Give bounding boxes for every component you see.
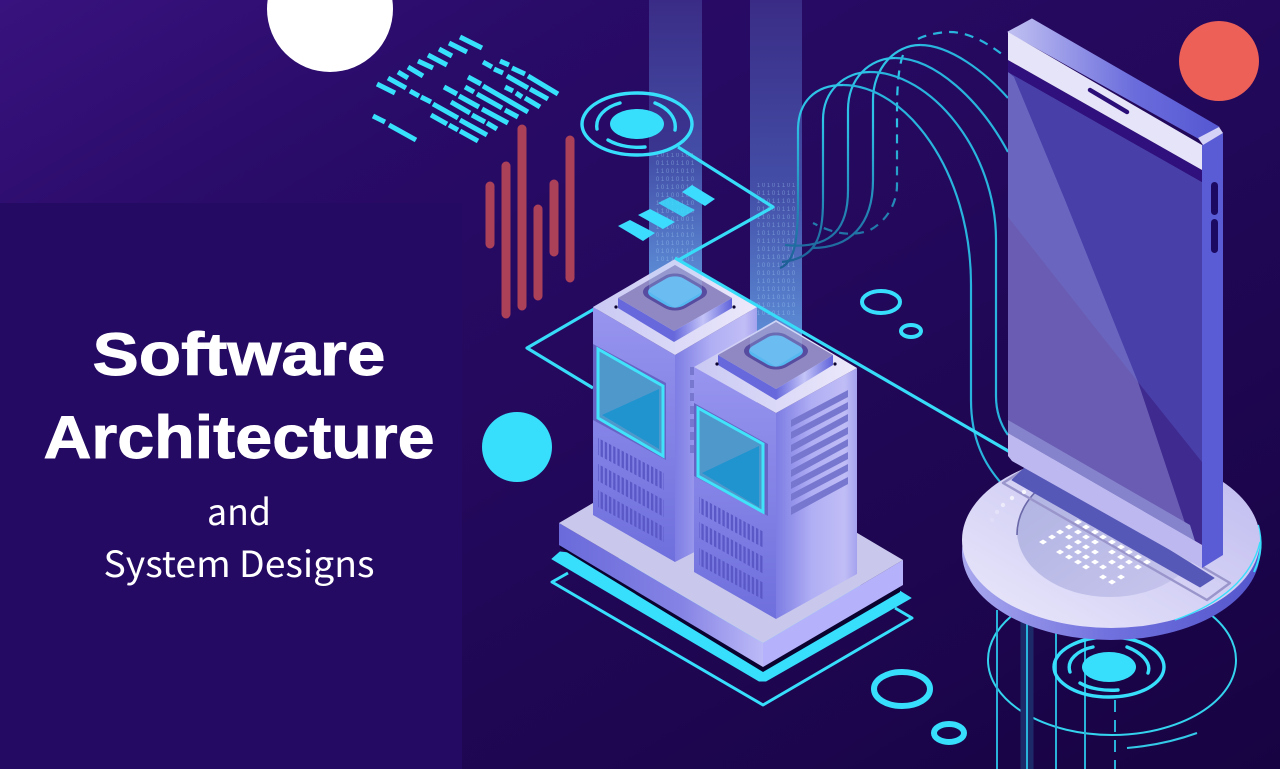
binary digits left beam: 0 1 0 1 1 0 1 0: [656, 233, 695, 239]
title: Architecture: [44, 404, 434, 471]
phone screen: [1008, 72, 1202, 545]
binary digits left beam: 1 0 1 0 0 1 1 1: [656, 225, 695, 231]
slot outline: [1003, 466, 1230, 600]
lower rings: [874, 672, 964, 742]
title: [44, 321, 434, 471]
binary digits right beam: 0 1 1 0 1 1 0 1: [757, 239, 796, 245]
binary digits right beam: 1 1 0 1 0 1 0 1: [757, 215, 796, 221]
white circle: [267, 0, 393, 72]
cyan dash pattern: [373, 37, 558, 141]
binary digits left beam: 0 1 0 1 0 1 1 0: [656, 177, 695, 183]
bottom arc: [1127, 733, 1197, 748]
binary digits right beam: 1 0 0 1 1 0 1 1: [757, 263, 796, 269]
chip plate back tower: [618, 298, 674, 342]
binary digits right beam: 0 1 0 1 0 1 1 0: [757, 271, 796, 277]
phone base disc: [962, 452, 1261, 640]
phone top bezel: [1008, 32, 1202, 170]
thick cyan platform band: [552, 552, 911, 681]
phone bottom bezel: [1008, 433, 1202, 568]
vents back tower: [598, 438, 664, 490]
side stripes front tower: [791, 390, 848, 515]
screen light band: [1008, 72, 1195, 541]
server tower front: [694, 320, 857, 619]
window front tower: [694, 403, 768, 516]
binary digits left beam: 1 0 1 1 0 1 0 1: [656, 153, 695, 159]
top ring target: [582, 93, 692, 155]
phone speaker: [1090, 90, 1127, 112]
server platform: [559, 440, 903, 667]
screen lower band: [1008, 420, 1195, 541]
small rings right of towers: [862, 291, 921, 337]
binary digits left beam: 1 1 0 1 0 1 0 1: [656, 241, 695, 247]
arch signal lines: [780, 32, 1008, 484]
big thin ring below phone: [988, 585, 1236, 735]
subtitle: System Designs: [104, 536, 374, 588]
data tiles: [618, 185, 715, 241]
binary digits right beam: 0 1 1 0 0 1 1 0: [757, 207, 796, 213]
binary digits right beam: 1 0 1 0 1 1 0 1: [757, 311, 796, 317]
binary digits left beam: 1 0 1 1 0 0 1 1: [656, 185, 695, 191]
server tower back: [593, 259, 757, 562]
vertical signal lines: [997, 610, 1115, 769]
binary digits right beam: 1 1 0 1 1 0 0 1: [757, 279, 796, 285]
binary digits right beam: 0 1 1 1 0 1 0 1: [757, 255, 796, 261]
binary digits left beam: 1 0 1 1 0 1 0 1: [656, 257, 695, 263]
phone side buttons: [1211, 182, 1218, 253]
binary digits left beam: [656, 153, 695, 263]
phone slot: [1012, 463, 1214, 587]
light beam right: [750, 0, 802, 355]
inner recess: [1017, 465, 1203, 597]
screen purple area: [1008, 217, 1195, 541]
subtitle: and: [207, 484, 271, 536]
binary digits left beam: 0 1 1 0 1 1 0 1: [656, 161, 695, 167]
phone side: [1202, 133, 1223, 568]
binary digits left beam: 1 0 0 1 0 1 1 0: [656, 201, 695, 207]
binary digits left beam: 0 1 1 0 0 1 0 1: [656, 193, 695, 199]
left title panel: [0, 203, 462, 769]
binary digits left beam: 0 1 1 0 1 0 0 1: [656, 217, 695, 223]
phone dark strip: [1008, 60, 1202, 182]
cyan circle: [482, 412, 552, 482]
binary digits right beam: 1 0 1 1 0 0 1 0: [757, 231, 796, 237]
binary digits left beam: 1 1 0 0 1 0 1 0: [656, 169, 695, 175]
vents front tower: [699, 497, 764, 548]
platform shadow: [560, 540, 900, 672]
title: Software: [92, 321, 386, 388]
chip plate front tower: [718, 355, 776, 400]
binary digits right beam: 0 1 0 1 1 0 1 0: [757, 303, 796, 309]
fading led arc: [990, 490, 1026, 522]
binary digits left beam: 0 1 0 0 1 1 1 0: [656, 249, 695, 255]
binary digits right beam: [757, 183, 796, 317]
window back tower: [593, 344, 666, 460]
binary digits right beam: 1 0 1 0 1 1 0 1: [757, 183, 796, 189]
screen dark triangle: [1138, 382, 1202, 545]
binary digits right beam: 0 1 1 0 1 0 1 0: [757, 287, 796, 293]
binary digits right beam: 1 0 0 1 1 1 0 1: [757, 199, 796, 205]
binary digits right beam: 1 0 1 0 1 0 1 0: [757, 247, 796, 253]
binary digits right beam: 0 1 0 1 1 0 1 1: [757, 223, 796, 229]
phone: [1008, 19, 1223, 568]
circuit line behind towers: [527, 147, 773, 388]
bottom ring target: [1054, 637, 1164, 697]
side vent back tower: [690, 367, 694, 457]
binary digits right beam: 1 0 1 1 0 1 0 1: [757, 295, 796, 301]
thin platform outline: [552, 573, 912, 705]
circuit line front: [675, 258, 1010, 452]
light beam left: [649, 0, 702, 295]
led dots: [1039, 520, 1151, 584]
phone top face: [1008, 19, 1219, 138]
subtitle: [104, 484, 374, 588]
red equalizer bars: [490, 129, 570, 314]
binary digits right beam: 0 1 1 0 1 0 1 0: [757, 191, 796, 197]
coral circle: [1179, 21, 1259, 101]
binary digits left beam: 1 1 0 1 1 0 1 0: [656, 209, 695, 215]
